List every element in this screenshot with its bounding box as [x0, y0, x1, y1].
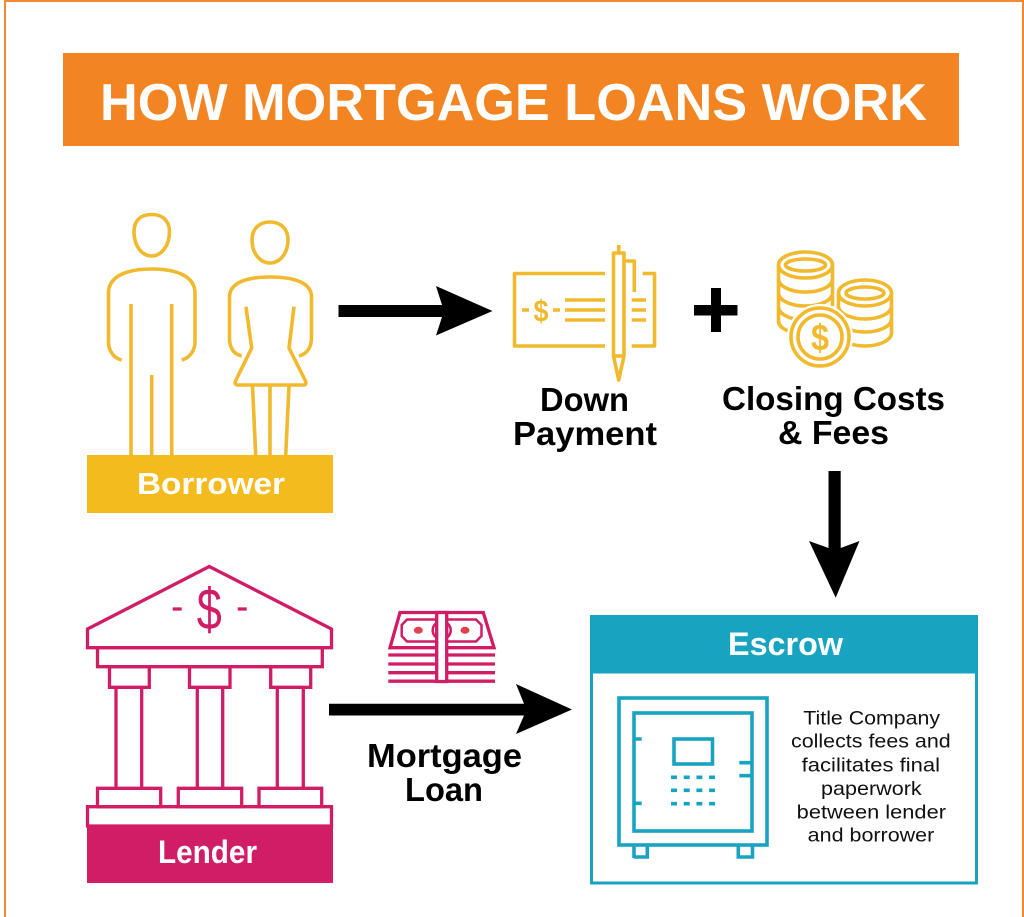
- arrow: borrower to payments: [338, 286, 492, 336]
- panel: closing costs and fees: [722, 252, 945, 451]
- closing costs label: & Fees: [778, 414, 889, 451]
- title banner: [63, 53, 959, 146]
- escrow description: between lender: [797, 801, 947, 823]
- icon: woman: [230, 222, 312, 455]
- panel: down payment: [513, 245, 657, 452]
- icon: bank building: $: [197, 577, 222, 642]
- icon: check and pen: [514, 245, 654, 380]
- escrow header: [590, 615, 978, 674]
- down payment label: Payment: [513, 415, 657, 452]
- escrow description: collects fees and: [791, 731, 951, 753]
- escrow header: Escrow: [728, 626, 843, 662]
- arrow: fees down to escrow: [809, 471, 860, 598]
- icon: man: [108, 214, 195, 455]
- icon: check and pen: $: [534, 293, 548, 328]
- escrow description: and borrower: [808, 825, 935, 847]
- title banner: HOW MORTGAGE LOANS WORK: [100, 74, 927, 132]
- arrow: mortgage loan to escrow: [329, 684, 572, 734]
- lender label bar: [87, 825, 333, 883]
- panel: escrow: [590, 615, 978, 883]
- panel: borrower: [87, 214, 333, 513]
- mortgage loan label: Mortgage: [367, 737, 522, 774]
- mortgage loan label: Loan: [405, 771, 483, 808]
- lender label bar: Lender: [158, 834, 257, 870]
- borrower label bar: [87, 455, 333, 513]
- down payment label: Down: [540, 381, 629, 418]
- icon: safe: [619, 698, 767, 858]
- panel: lender: [87, 566, 333, 883]
- icon: coin stacks: [778, 252, 892, 368]
- icon: stack of cash: [388, 612, 495, 682]
- icon: plus sign: [694, 288, 738, 332]
- closing costs label: Closing Costs: [722, 380, 945, 417]
- escrow description: paperwork: [821, 778, 922, 800]
- icon: bank building: [88, 566, 332, 826]
- icon: coin stacks: $: [811, 317, 829, 358]
- escrow description: Title Company: [803, 707, 940, 729]
- escrow description: facilitates final: [802, 755, 940, 777]
- borrower label bar: Borrower: [137, 466, 285, 501]
